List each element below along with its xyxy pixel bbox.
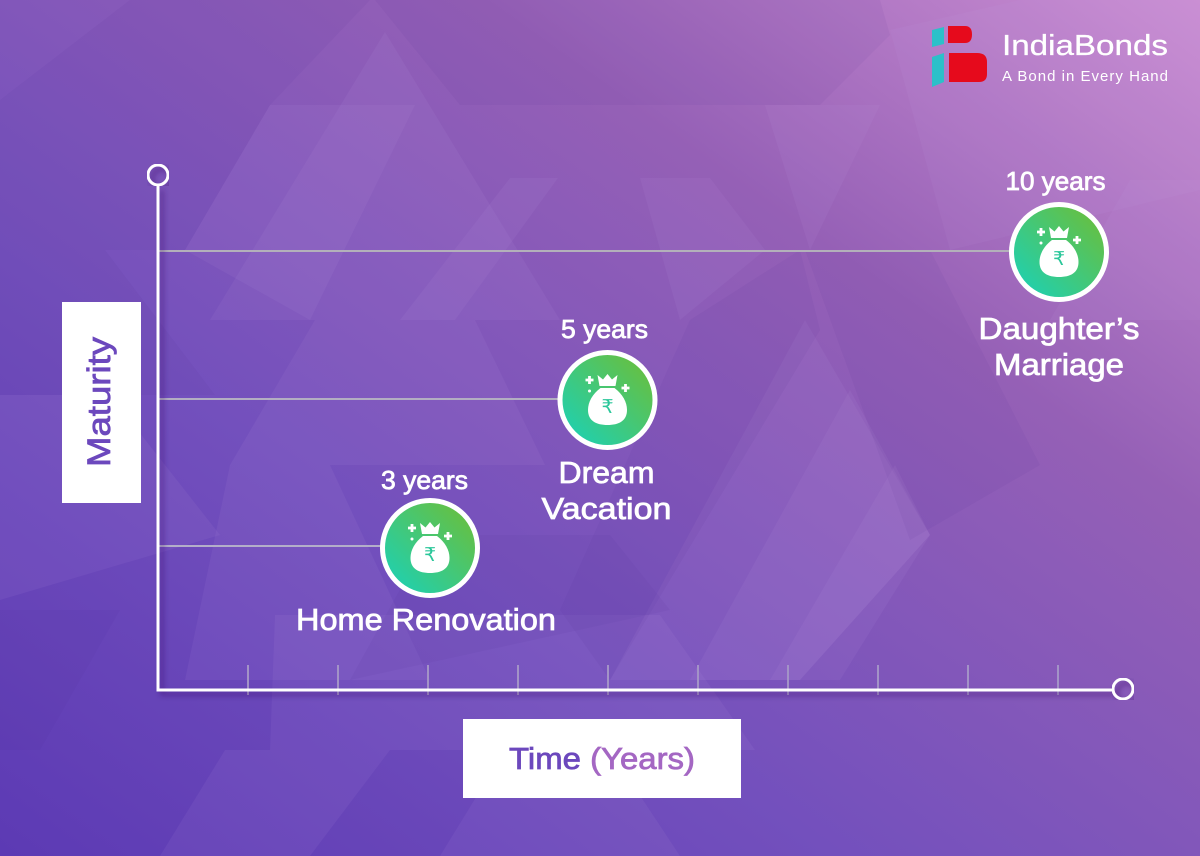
milestone: 5 years [542,314,672,526]
milestone: 10 years: Marriage [994,347,1124,382]
icon: money bag: ₹ [601,397,614,418]
x axis end circle [1113,679,1133,699]
milestone: 10 years [978,166,1140,382]
milestone: 3 years [296,465,556,637]
logo: IndiaBonds [932,26,1168,87]
dark triangle pattern [0,0,1040,750]
icon: money bag: ₹ [1053,249,1065,270]
logo tagline: A Bond in Every Hand [1002,68,1168,85]
icon: money bag [1012,204,1106,300]
goal: Home Renovation: Home Renovation [296,602,556,637]
goal: Dream Vacation: Dream [558,455,654,490]
icon: money bag: ₹ [424,545,436,566]
icon: logo mark [932,26,987,87]
horizontal guide lines [158,250,1010,547]
label: 3 years: 3 years [381,465,468,495]
y axis label box: Maturity [81,337,117,467]
axis ticks [247,665,1059,695]
milestone: 5 years: Vacation [542,491,672,526]
x axis label box: Time (Years) [509,741,695,776]
icon: money bag [382,500,478,596]
logo wordmark: IndiaBonds [1002,30,1168,62]
label: 5 years: 5 years [561,314,648,344]
y axis label box [62,302,141,503]
label: 10 years: 10 years [1006,166,1106,196]
x axis label box [463,719,741,798]
axes [158,186,1112,690]
icon: money bag [560,352,655,448]
chart: maturity vs time [148,165,1133,699]
goal: Daughter's Marriage: Daughter’s [978,311,1140,346]
y axis end circle [148,165,168,185]
